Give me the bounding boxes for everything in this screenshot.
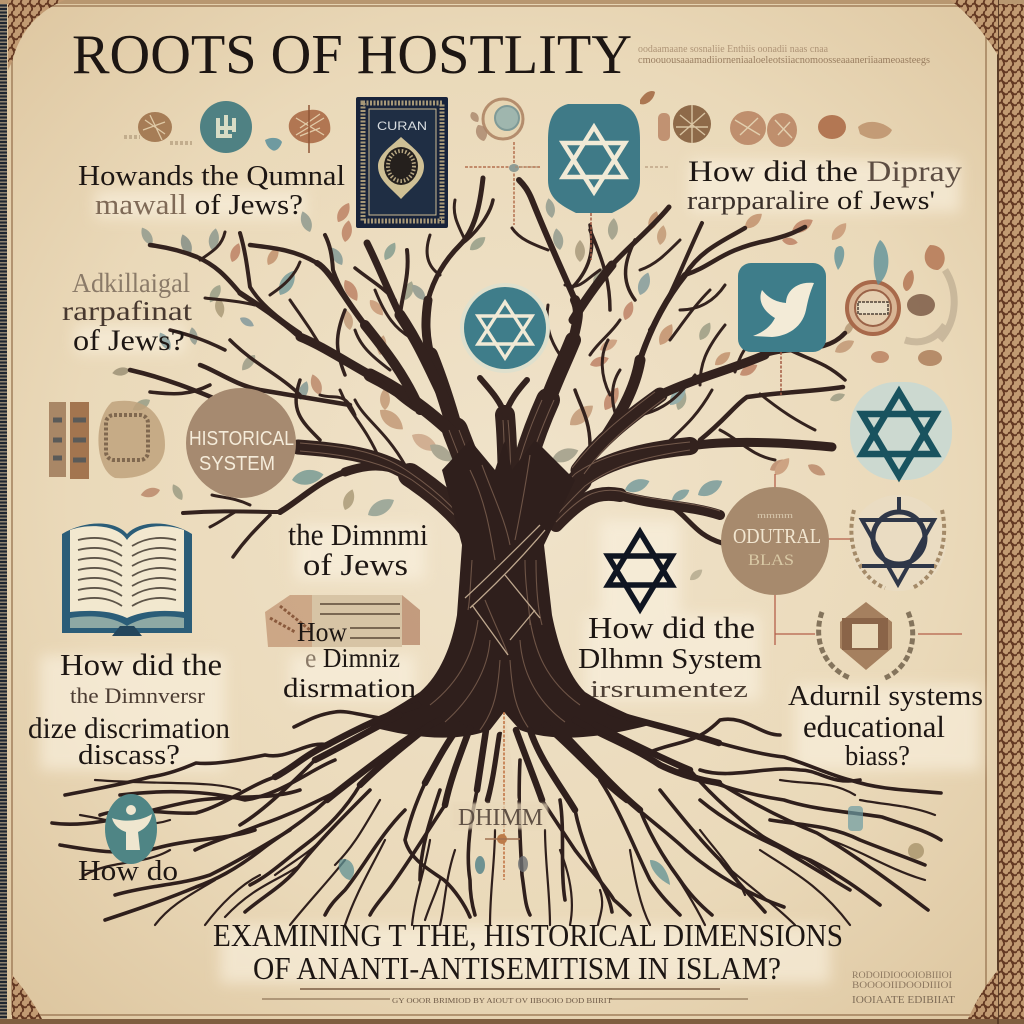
question text: centre right: How did the: [588, 610, 755, 645]
question text: lower right: Adurnil systems: [788, 681, 983, 712]
question text: upper left middle: [62, 268, 193, 357]
question text: top left: mawall of Jews?: [95, 190, 303, 221]
centre stalk: [505, 415, 508, 530]
circle: cultural bias: [721, 474, 962, 645]
footer heading: EXAMINING T THE, HISTORICAL DIMENSIONS: [213, 917, 843, 953]
icon: small teal petal: [265, 138, 282, 151]
question text: top right: [687, 155, 962, 215]
ancient tablets left: [49, 401, 165, 479]
question text: top right: How did the Dipray: [688, 155, 962, 188]
question text: top left: Howands the Qumnal: [78, 161, 345, 192]
question text: lower right: educational: [803, 709, 945, 744]
star badge: teal shield: [515, 104, 670, 260]
question text: centre left: the Dimnmi: [288, 517, 428, 552]
leaves scattered on the branches: [112, 198, 857, 583]
social bird icon: [738, 263, 826, 395]
top left leaf motifs: [124, 101, 330, 153]
limb striations: [300, 392, 720, 618]
faded frieze: [265, 595, 420, 647]
question text: dhimmi discrimination: e Dimniz: [305, 643, 400, 673]
footer heading: OF ANANTI-ANTISEMITISM IN ISLAM?: [253, 950, 781, 986]
small print bottom right: [852, 970, 955, 1006]
book icon: Quran: CURAN: [377, 119, 427, 133]
question text: lower left: How did the: [60, 647, 222, 682]
book icon: Quran: [356, 97, 448, 228]
ornament with line beside the book: [465, 99, 540, 225]
wreath emblem: [819, 602, 913, 678]
root gap wedge with dotted line: [490, 712, 518, 880]
question text: lower right: [788, 681, 983, 772]
circle: historical system: HISTORICAL: [189, 428, 294, 450]
circle: historical system: SYSTEM: [199, 453, 275, 475]
question text: upper left middle: rarpafinat: [62, 296, 193, 326]
roots icon: teal oval: [105, 794, 157, 864]
question text: centre right: irsrumentez: [590, 677, 748, 703]
right limbs thin: [765, 333, 845, 355]
question text: dhimmi discrimination: [283, 617, 417, 703]
branches of the tree: [130, 178, 845, 610]
icon: teal circle with glyph: [200, 101, 252, 153]
question text: upper left middle: of Jews?: [73, 324, 185, 357]
left limbs thin: [240, 293, 300, 337]
footer rules and small text: GY OOOR BRIMIOD BY AIOUT OV IIBOOIO DOD BIIRIT: [392, 997, 613, 1005]
question text: dhimmi discrimination: disrmation: [283, 673, 417, 703]
footer heading: [213, 917, 843, 986]
small print bottom right: BOOOOIIDOODIIIOI: [852, 980, 952, 990]
small print bottom right: RODOIDIOOOIOBIIIOI: [852, 970, 952, 980]
circle: cultural bias: BLAS: [748, 552, 794, 569]
question text: centre right: [578, 610, 762, 703]
coin medallion and leaf cluster: [834, 240, 954, 366]
root ornaments: [339, 806, 924, 885]
trunk crossing strands: [465, 525, 545, 655]
roots: [52, 705, 941, 925]
icon: leaf medallion large: [289, 105, 330, 153]
trunk strands: [430, 455, 580, 730]
corner ornament: top left: [8, 0, 65, 70]
star dark: [608, 532, 672, 609]
open book icon: [62, 524, 192, 636]
question text: top left: [78, 161, 345, 221]
how do label: How do: [78, 855, 178, 887]
circle: cultural bias: mmmm: [757, 511, 794, 520]
question text: lower left: the Dimnversr: [70, 683, 206, 708]
top right leaf motifs: [640, 91, 892, 147]
faded subtitle script: cmoouousaaamadiiorneniaaloeleotsiiacnomoosseaaaneriiaameoasteegs: [638, 54, 930, 66]
corner ornament: bottom right: [968, 970, 998, 1019]
question text: lower left: dize discrimation: [28, 712, 230, 745]
question text: centre right: Dlhmn System: [578, 643, 762, 675]
question text: centre left: of Jews: [303, 547, 408, 582]
corner ornament: bottom left: [12, 975, 42, 1019]
circle: cultural bias: ODUTRAL: [733, 524, 821, 548]
question text: dhimmi discrimination: How: [297, 617, 347, 647]
left limbs thick: [455, 430, 492, 530]
title: ROOTS OF HOSTLITY: [72, 24, 632, 86]
question text: lower right: biass?: [845, 741, 910, 772]
star circle right: [850, 382, 952, 480]
icon: leaf medallion small: [124, 112, 192, 143]
corner ornament: top right: [950, 0, 998, 55]
trunk: [365, 440, 650, 738]
text halos: [40, 160, 980, 983]
circle: historical system: [186, 388, 296, 498]
small print bottom right: IOOIAATE EDIBIIAT: [852, 995, 955, 1006]
question text: lower left: [28, 647, 230, 771]
question text: top right: rarpparalire of Jews': [687, 186, 935, 215]
right limbs thick: [512, 400, 548, 520]
question text: upper left middle: Adkillaigal: [72, 268, 190, 298]
question text: centre left: [288, 517, 428, 582]
faded subtitle script: oodaamaane sosnaliie Enthiis oonadii naas cnaa: [638, 44, 829, 55]
faded subtitle script: [638, 44, 930, 66]
roots label: DHIMM: [458, 805, 543, 831]
star with wreath right: [850, 495, 946, 591]
question text: lower left: discass?: [78, 739, 180, 771]
central star circle: [460, 283, 550, 373]
